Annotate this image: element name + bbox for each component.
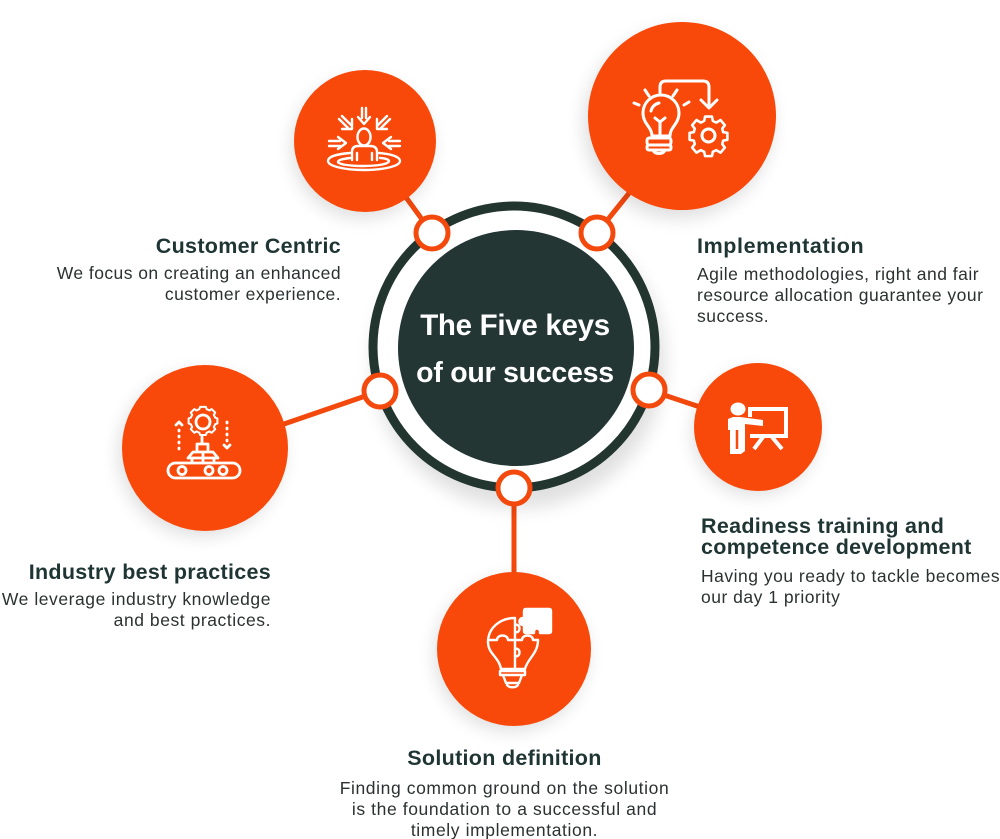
circle: customer centric: [292, 70, 436, 218]
text: customer centric: Customer Centric: [156, 234, 341, 258]
central hub: The Five keys: [420, 309, 610, 342]
connector lines: [284, 192, 700, 580]
text: solution definition: is the foundation to a successful and: [352, 799, 657, 819]
circle: industry best practices: [119, 365, 288, 536]
text: implementation: success.: [697, 306, 769, 326]
text: readiness: [701, 514, 1000, 607]
text: readiness: our day 1 priority: [701, 587, 840, 607]
text: solution definition: Solution definition: [407, 746, 602, 770]
icon: puzzle bulb: [488, 609, 551, 687]
icon: conveyor with gear: [168, 407, 240, 478]
icon: bulb and gear: [634, 81, 727, 156]
circle: readiness: [693, 363, 822, 495]
icon: person with arrows: [328, 108, 400, 170]
circle: implementation: [584, 22, 776, 218]
text: customer centric body: customer experience.: [165, 284, 341, 304]
text: industry best practices: and best practices.: [114, 610, 271, 630]
text: readiness: competence development: [701, 535, 972, 559]
text: industry best practices: Industry best practices: [29, 560, 271, 584]
icon: trainer at board: [728, 402, 786, 454]
text: readiness: Having you ready to tackle becomes: [701, 566, 1000, 586]
text: customer centric body: We focus on creating an enhanced: [57, 263, 341, 283]
text: customer centric body: [56, 263, 341, 304]
connector nodes: [364, 217, 665, 504]
text: solution definition: Finding common ground on the solution: [340, 778, 669, 798]
circle: solution definition: [435, 572, 591, 731]
text: industry best practices: [2, 560, 271, 630]
central hub: of our success: [416, 357, 614, 389]
text: implementation: Agile methodologies, right and fair: [697, 264, 979, 284]
text: implementation: Implementation: [697, 234, 864, 258]
text: implementation: resource allocation guarantee your: [697, 285, 983, 305]
text: implementation: [697, 234, 983, 326]
text: readiness: Readiness training and: [701, 514, 944, 538]
text: industry best practices: We leverage industry knowledge: [2, 589, 271, 609]
central hub: [373, 206, 665, 508]
text: solution definition: [340, 746, 669, 839]
